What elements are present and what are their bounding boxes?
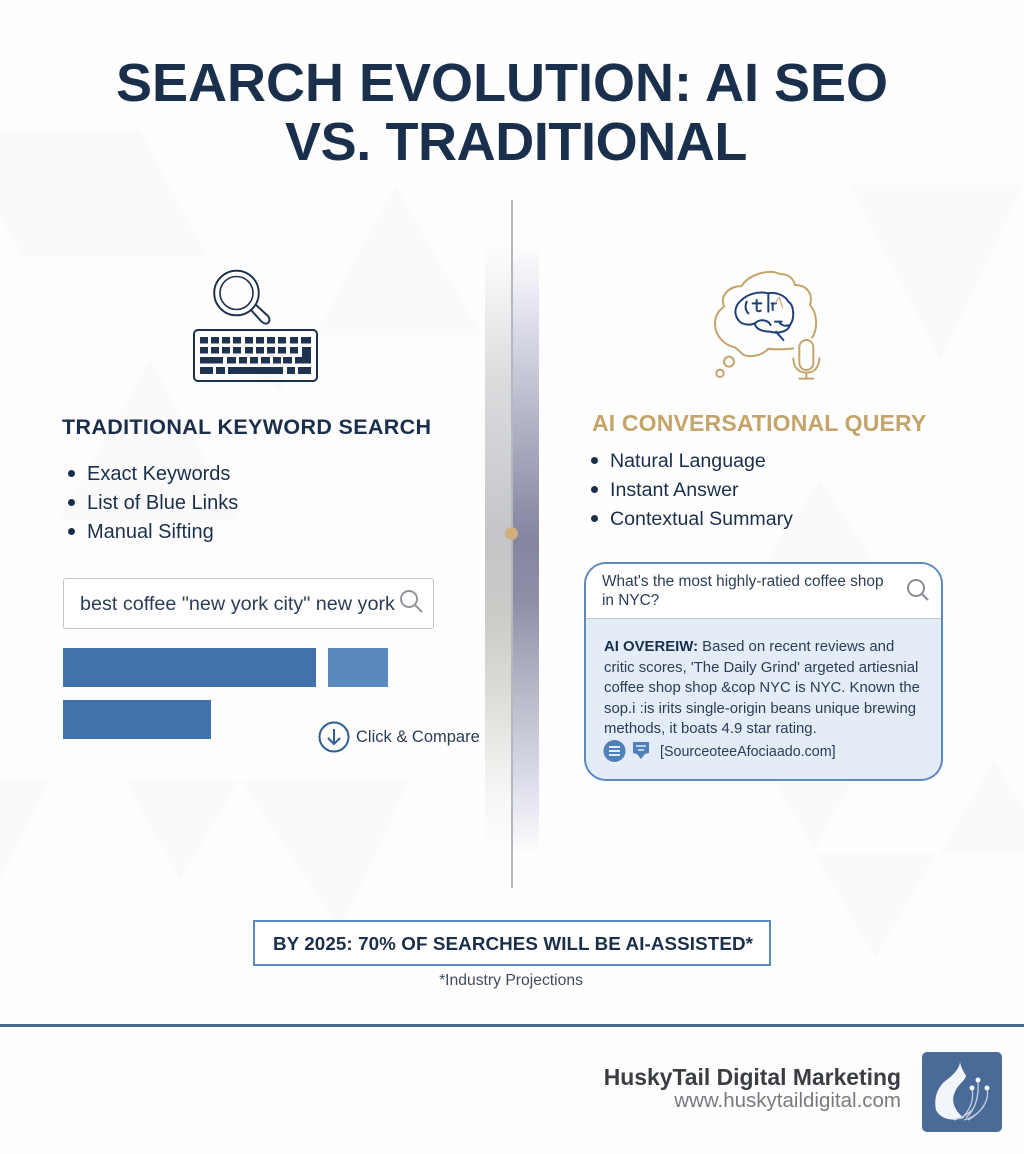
- heading: AI conversational query: AI CONVERSATIONAL QUERY: [592, 410, 926, 436]
- AI overview card: [584, 562, 943, 781]
- title: SEARCH EVOLUTION: AI SEO: [116, 53, 888, 113]
- center divider: [485, 200, 539, 888]
- list: traditional features: Exact Keywords: [87, 463, 230, 485]
- icon: thought bubble with brain and microphone: [714, 270, 820, 380]
- click and compare: Click & Compare: [356, 728, 480, 746]
- footer brand: HuskyTail Digital Marketing: [604, 1064, 901, 1090]
- footer rule: [0, 1024, 1024, 1027]
- icon: document: [604, 740, 626, 762]
- blue link results: [63, 648, 388, 739]
- icon: magnifier over keyboard: [193, 270, 318, 382]
- footer brand: [604, 1064, 901, 1112]
- query area: in NYC?: [602, 592, 659, 608]
- overview text: AI OVEREIW: Based on recent reviews and: [604, 639, 894, 655]
- callout: 70 percent stat: [253, 920, 771, 966]
- title: [116, 53, 888, 172]
- icon: search: [400, 590, 423, 613]
- overview text: coffee shop shop &cop NYC is NYC. Known the: [604, 680, 920, 696]
- overview text: sop.i :is irits single-origin beans unique brewing: [604, 701, 916, 717]
- icon: search: [907, 579, 929, 601]
- list: AI features: Contextual Summary: [610, 508, 793, 530]
- overview text: [604, 639, 920, 737]
- title: VS. TRADITIONAL: [285, 112, 747, 172]
- overview text: critic scores, 'The Daily Grind' argeted artiesnial: [604, 660, 918, 676]
- callout: 70 percent stat: BY 2025: 70% OF SEARCHES WILL BE AI-ASSISTED*: [273, 933, 753, 954]
- icon: down arrow: [318, 722, 350, 752]
- list: traditional features: List of Blue Links: [87, 492, 238, 514]
- footnote: *Industry Projections: [439, 972, 583, 989]
- heading: traditional keyword search: TRADITIONAL KEYWORD SEARCH: [62, 415, 431, 439]
- click and compare: [318, 722, 480, 752]
- query area: [586, 564, 941, 619]
- query area: What's the most highly-ratied coffee shop: [602, 573, 884, 590]
- overview text: methods, it boats 4.9 star rating.: [604, 721, 817, 737]
- source row: [SourceoteeAfociaado.com]: [660, 744, 836, 760]
- keyword search box: [63, 578, 434, 629]
- icon: chat: [633, 742, 649, 759]
- list: traditional features: Manual Sifting: [87, 521, 214, 543]
- list: AI features: [591, 450, 793, 530]
- footer brand: www.huskytaildigital.com: [674, 1089, 901, 1112]
- source row: [604, 740, 836, 762]
- logo: [922, 1052, 1002, 1132]
- list: AI features: Natural Language: [610, 450, 766, 472]
- list: traditional features: [68, 463, 238, 543]
- keyword search box: best coffee "new york city" new york: [80, 593, 395, 615]
- list: AI features: Instant Answer: [610, 479, 739, 501]
